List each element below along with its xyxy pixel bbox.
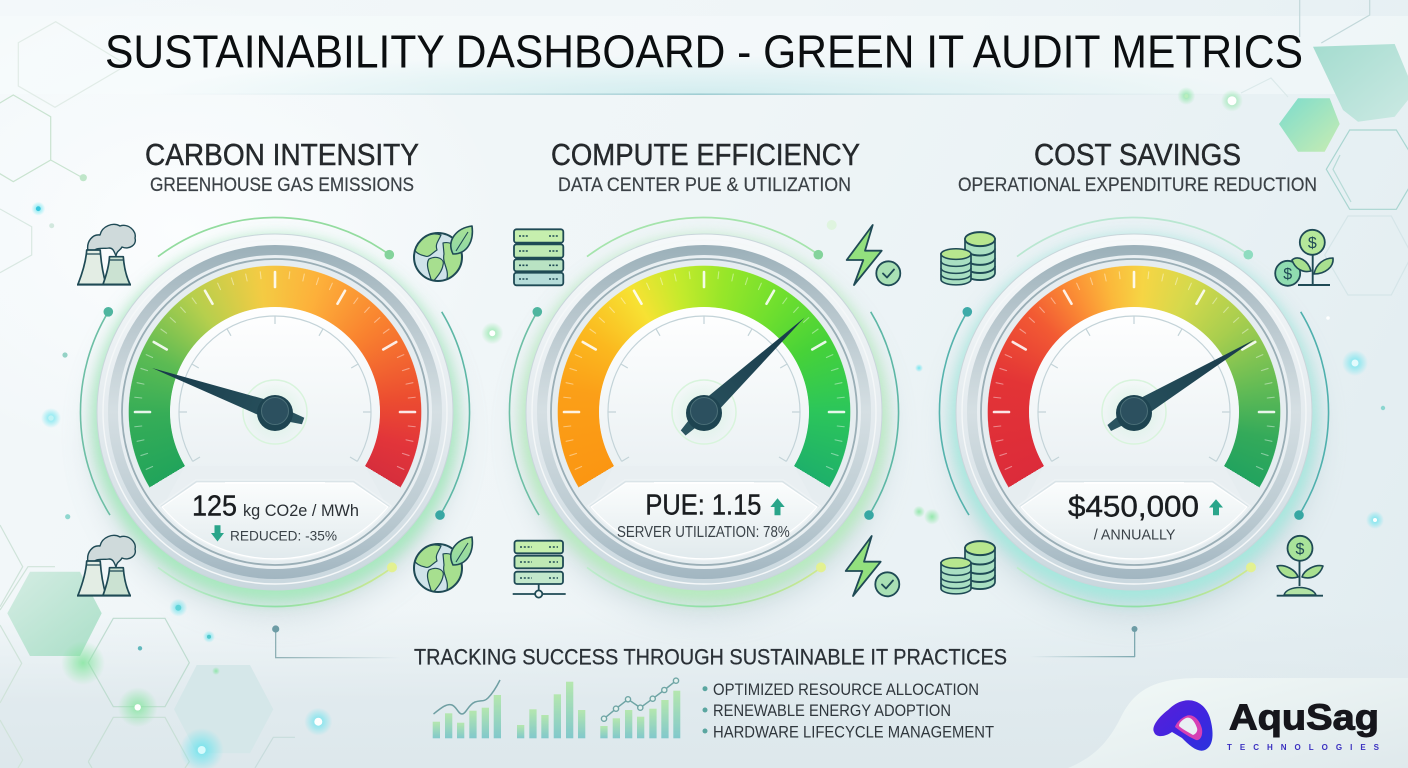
panel: carbon intensity heading: GREENHOUSE GAS EMISSIONS (150, 175, 414, 196)
readout: carbon value (192, 490, 359, 543)
panel: carbon intensity heading: CARBON INTENSITY (145, 137, 419, 172)
readout: carbon value: kg CO2e / MWh (243, 502, 359, 520)
icon: server rack top (514, 229, 563, 285)
readout: PUE value (617, 489, 790, 541)
icon: globe with leaf bottom (414, 537, 472, 594)
needle (677, 311, 811, 438)
readout: savings value (1068, 490, 1223, 543)
icon: coin stacks top (941, 232, 995, 285)
title band (0, 16, 1408, 94)
connector: right (1030, 626, 1138, 657)
chart: bars (517, 682, 585, 738)
icon: server rack bottom (513, 541, 566, 598)
readout: PUE value: PUE: 1.15 (646, 489, 762, 521)
connector: left (272, 625, 400, 658)
panel: compute efficiency heading: COMPUTE EFFICIENCY (551, 137, 860, 172)
icon: globe with leaf top (414, 226, 472, 283)
readout: carbon value: REDUCED: -35% (230, 527, 337, 543)
icon: power plant top (77, 224, 135, 285)
needle (149, 360, 306, 430)
icon: lightning bolt bottom (846, 536, 899, 596)
bullet list (702, 680, 994, 742)
panel: cost savings heading: OPERATIONAL EXPENDITURE REDUCTION (958, 175, 1317, 196)
logo panel (1068, 678, 1408, 768)
readout: carbon value: 125 (192, 490, 237, 522)
bullet list: RENEWABLE ENERGY ADOPTION (713, 701, 951, 720)
bullet list: OPTIMIZED RESOURCE ALLOCATION (713, 680, 979, 699)
readout: PUE value: SERVER UTILIZATION: 78% (617, 524, 790, 541)
readout: savings value: $450,000 (1068, 490, 1199, 523)
panel: cost savings heading: COST SAVINGS (1034, 137, 1241, 172)
icon: money plant top (1275, 230, 1333, 286)
icon: power plant bottom (77, 535, 135, 596)
logo wordmark: AquSag (1229, 696, 1379, 737)
needle (1105, 332, 1259, 434)
gauge: cost savings (938, 216, 1330, 624)
icon: lightning bolt top (847, 225, 900, 285)
icon: money plant bottom (1277, 536, 1323, 596)
icon: money plant top: $ (1308, 235, 1317, 252)
icon: money plant bottom: $ (1296, 541, 1305, 558)
gauge: compute efficiency (508, 216, 900, 625)
chart: bars with markers (600, 678, 680, 738)
icon: money plant top: $ (1283, 266, 1292, 283)
logo tagline: TECHNOLOGIES (1227, 743, 1380, 752)
logo icon (1153, 700, 1213, 751)
readout: savings value: / ANNUALLY (1094, 526, 1176, 543)
bullet list: HARDWARE LIFECYCLE MANAGEMENT (713, 723, 994, 742)
footer heading: TRACKING SUCCESS THROUGH SUSTAINABLE IT PRACTICES (414, 644, 1007, 669)
gauge: carbon intensity (80, 216, 470, 626)
chart: bars with trend line (433, 680, 501, 738)
panel: compute efficiency heading: DATA CENTER PUE & UTILIZATION (558, 175, 851, 196)
title: SUSTAINABILITY DASHBOARD - GREEN IT AUDIT METRICS (105, 26, 1303, 78)
icon: coin stacks bottom (941, 541, 995, 594)
